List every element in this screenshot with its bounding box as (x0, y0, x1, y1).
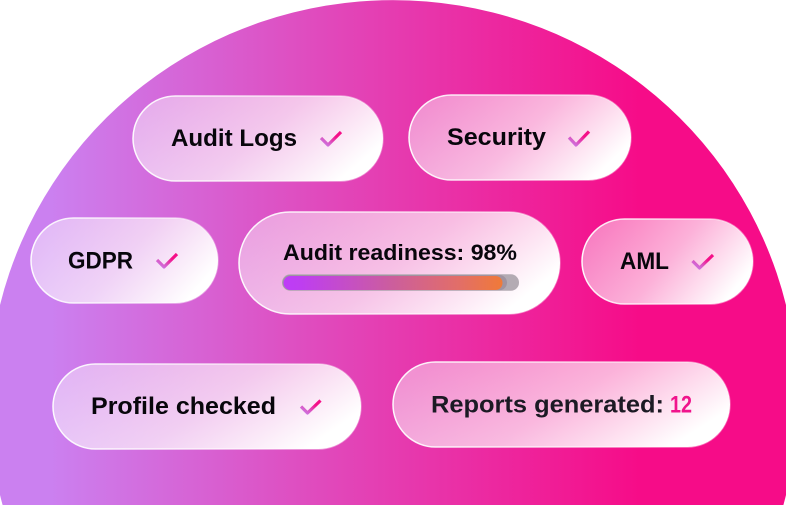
value: 12: 12 (670, 392, 692, 418)
label: Audit Logs: Audit Logs (171, 125, 297, 152)
label: Profile checked: Profile checked (91, 393, 276, 420)
icon: check (569, 132, 589, 145)
label: AML: AML (620, 248, 669, 275)
label: Reports generated: Reports generated: (431, 392, 664, 418)
label: Audit readiness: Audit readiness: 98% (283, 240, 517, 265)
pill: Audit Logs (133, 96, 383, 181)
icon: check (157, 254, 177, 267)
pill: AML (582, 219, 753, 304)
panel: Audit readiness (239, 212, 560, 314)
label: Security: Security (447, 124, 547, 151)
icon: check (321, 132, 341, 145)
icon: check (301, 400, 320, 413)
pill: GDPR (31, 218, 218, 303)
progress bar (282, 274, 519, 291)
pill: Security (409, 95, 631, 180)
label: GDPR: GDPR (68, 248, 133, 274)
pill: Reports generated (393, 362, 730, 447)
icon: check (692, 255, 713, 268)
pill: Profile checked (53, 364, 361, 449)
